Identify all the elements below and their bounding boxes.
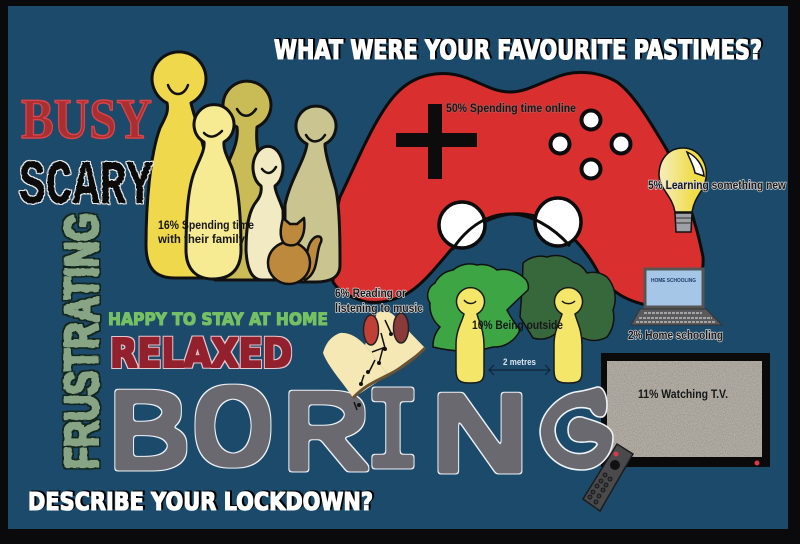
cat bbox=[268, 218, 321, 284]
headphones bbox=[364, 313, 408, 345]
controller d-pad bbox=[396, 104, 477, 179]
label: reading bbox=[335, 288, 424, 315]
word: boring: N bbox=[427, 375, 533, 506]
icon: remote control bbox=[583, 444, 633, 511]
icon: laptop: HOME SCHOOLING bbox=[651, 278, 696, 284]
label: online: 50% Spending time online bbox=[446, 103, 576, 115]
label: watching tv: 11% Watching T.V. bbox=[638, 389, 728, 401]
icon: book and headphones bbox=[323, 311, 425, 410]
controller thumbsticks bbox=[439, 198, 581, 248]
label: home schooling: 2% Home schooling bbox=[628, 328, 723, 342]
label: family: 16% Spending time bbox=[158, 220, 254, 232]
label: family bbox=[157, 220, 254, 246]
word: boring: O bbox=[191, 368, 275, 499]
icon: trees bbox=[428, 255, 615, 351]
title: describe your lockdown: DESCRIBE YOUR LOCKDOWN? bbox=[28, 487, 373, 516]
word: boring bbox=[107, 368, 533, 506]
icon: family of pawn figures bbox=[146, 52, 340, 284]
icon: light bulb bbox=[659, 148, 706, 232]
word: boring: R bbox=[280, 373, 370, 504]
icon: two distancing figures bbox=[456, 288, 583, 383]
word: boring letter G bbox=[540, 387, 613, 470]
label: family: with their family bbox=[157, 234, 246, 246]
smiles bbox=[168, 85, 325, 173]
label: reading: 6% Reading or bbox=[335, 288, 406, 300]
label: outside: 10% Being outside bbox=[472, 320, 563, 332]
word: happy to stay at home: HAPPY TO STAY AT HOME bbox=[108, 310, 328, 330]
word: scary: SCARY bbox=[19, 151, 154, 222]
word: frustrating: FRUSTRATING bbox=[56, 213, 109, 469]
label: learning: 5% Learning something new bbox=[648, 180, 786, 192]
arrow: two metres bbox=[489, 357, 550, 375]
label: reading: listening to music bbox=[335, 303, 424, 315]
word: relaxed: RELAXED bbox=[110, 331, 292, 377]
word: boring: I bbox=[366, 370, 420, 501]
icon: red game controller bbox=[333, 72, 703, 305]
icon: laptop bbox=[631, 269, 722, 325]
icon: television bbox=[601, 353, 770, 467]
word: boring: B bbox=[107, 372, 189, 503]
controller buttons bbox=[550, 110, 630, 178]
music notes bbox=[354, 320, 391, 410]
arrow: two metres: 2 metres bbox=[503, 357, 536, 367]
word: busy: BUSY bbox=[21, 88, 152, 151]
